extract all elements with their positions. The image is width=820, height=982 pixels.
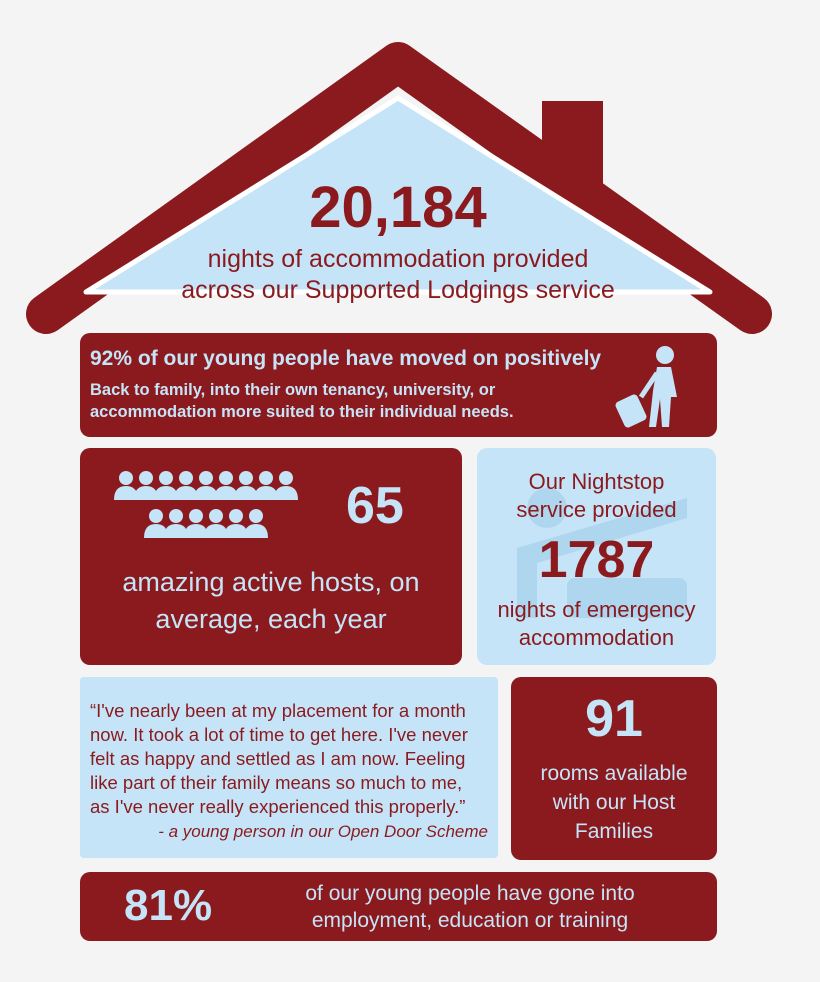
panel: hosts: 65 xyxy=(346,477,404,535)
panel: hosts xyxy=(80,448,462,665)
gable xyxy=(86,98,710,292)
panel: moved on: 92% of our young people have moved on positively xyxy=(90,347,601,370)
panel: rooms: Families xyxy=(575,820,653,843)
panel: employment: 81% xyxy=(124,881,212,930)
roof xyxy=(46,62,752,314)
panel: moved on: accommodation more suited to their individual needs. xyxy=(90,403,514,421)
panel: employment: of our young people have gone into xyxy=(305,882,635,905)
panel: nightstop: 1787 xyxy=(539,531,654,589)
headline stat: 20,184 xyxy=(309,175,487,240)
panel: quote: - a young person in our Open Door Scheme xyxy=(158,822,488,841)
panel: hosts: amazing active hosts, on xyxy=(122,567,420,597)
panel: rooms: rooms available xyxy=(540,762,688,785)
panel: moved on: Back to family, into their own tenancy, university, or xyxy=(90,381,495,399)
panel: rooms xyxy=(511,677,717,860)
panel: rooms: 91 xyxy=(585,690,643,748)
panel: quote: like part of their family means so much to me, xyxy=(90,772,462,793)
headline stat: across our Supported Lodgings service xyxy=(181,276,615,304)
panel: quote xyxy=(80,677,498,858)
panel: nightstop xyxy=(477,448,716,665)
panel: quote: now. It took a lot of time to get here. I've never xyxy=(90,724,468,745)
panel: nightstop: nights of emergency xyxy=(497,597,696,622)
panel: nightstop: accommodation xyxy=(519,625,674,650)
panel: quote: “I've nearly been at my placement for a month xyxy=(90,700,466,721)
house roof xyxy=(26,42,772,334)
icon: crowd xyxy=(114,471,298,538)
chimney xyxy=(542,101,603,221)
icon: traveller xyxy=(616,346,677,428)
panel: hosts: average, each year xyxy=(155,604,387,634)
panel: nightstop: Our Nightstop xyxy=(529,469,664,494)
panel: quote: felt as happy and settled as I am now. Feeling xyxy=(90,748,465,769)
panel: quote: as I've never really experienced this properly.” xyxy=(90,796,465,817)
icon: faded bed xyxy=(517,488,687,618)
panel: employment: employment, education or training xyxy=(312,909,628,932)
panel: rooms: with our Host xyxy=(553,791,675,814)
panel: nightstop: service provided xyxy=(516,497,677,522)
headline stat xyxy=(181,175,615,304)
headline stat: nights of accommodation provided xyxy=(208,245,588,273)
panel: moved on xyxy=(80,333,717,437)
panel: employment xyxy=(80,872,717,941)
